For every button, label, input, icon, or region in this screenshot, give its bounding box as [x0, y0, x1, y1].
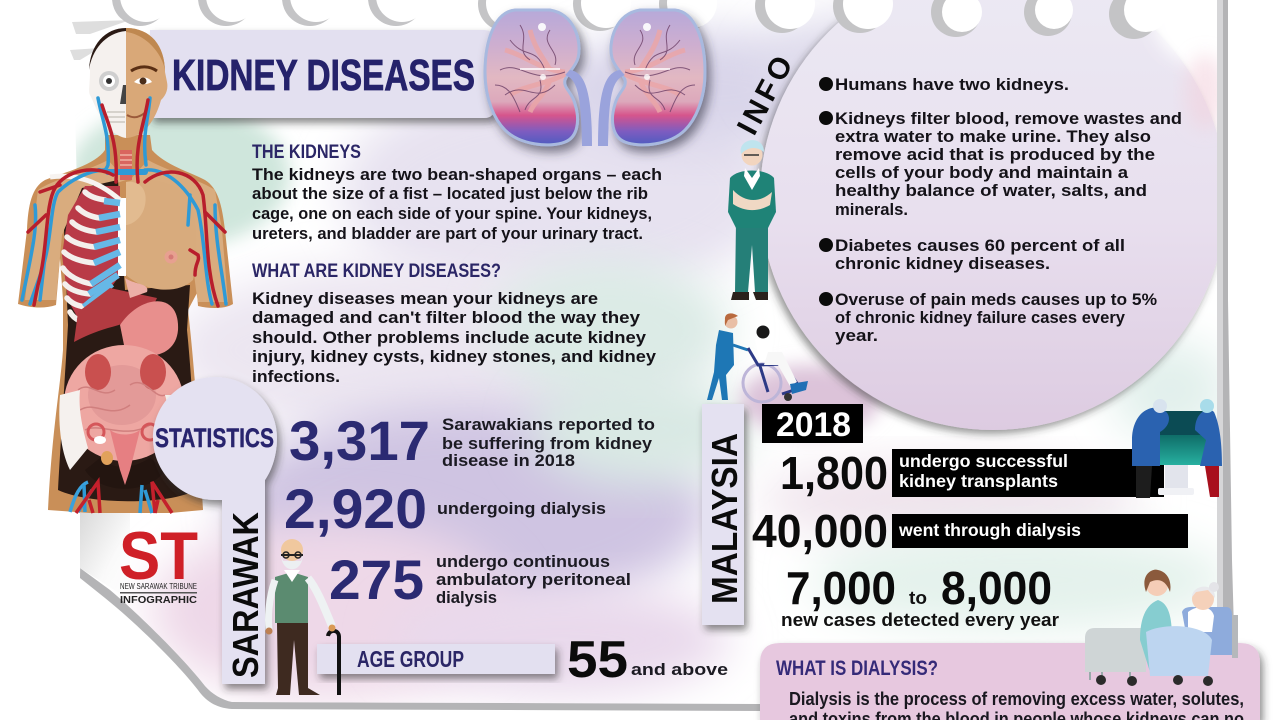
- text block: info bullets: Overuse of pain meds causes up to 5%: [835, 290, 1157, 309]
- stat: 55 and above: and above: [631, 660, 728, 679]
- stat: new cases: new cases detected every year: [781, 610, 1059, 630]
- stat: 3,317: [289, 409, 655, 472]
- heading: statistics: STATISTICS: [155, 423, 274, 453]
- age group bar: [317, 644, 555, 674]
- age group label: AGE GROUP: [357, 646, 464, 672]
- text block: what are kidney diseases: Kidney diseases mean your kidneys are: [252, 289, 598, 308]
- stat: 275: ambulatory peritoneal: [436, 570, 631, 589]
- statistics stem and circle: [153, 377, 277, 684]
- text block: the kidneys: cage, one on each side of your spine. Your kidneys,: [252, 204, 652, 223]
- title: KIDNEY DISEASES: [172, 51, 475, 100]
- stat: 2,920: 2,920: [284, 477, 427, 540]
- chest: [126, 180, 196, 290]
- panel: Malaysia label: [702, 404, 745, 625]
- stat: 40,000 dialysis: went through dialysis: [898, 520, 1081, 540]
- text block: info bullets: extra water to make urine. They also: [835, 127, 1151, 146]
- text block: info bullets: healthy balance of water, salts, and: [835, 181, 1147, 200]
- heading: what is dialysis: WHAT IS DIALYSIS?: [776, 657, 938, 680]
- stat: 275: [329, 548, 631, 611]
- illustration: nurse with wheelchair: [707, 313, 808, 402]
- stat: 2,920: [284, 477, 606, 540]
- label: Sarawak: SARAWAK: [225, 512, 266, 678]
- heading: info label: INFO: [731, 51, 800, 140]
- text block: what are kidney diseases: damaged and can't filter blood the way they: [252, 308, 641, 327]
- text block: the kidneys: THE KIDNEYS: [252, 142, 361, 163]
- stat: 2,920: undergoing dialysis: [437, 499, 606, 518]
- stat: new cases: 7,000: [786, 562, 896, 614]
- stat: new cases: 8,000: [941, 562, 1052, 614]
- stat: 55 and above: 55: [567, 631, 628, 689]
- text block: info bullets: remove acid that is produced by the: [835, 145, 1155, 164]
- pelvis and reproductive organs: [59, 390, 88, 470]
- panel: info circle: [760, 0, 1255, 430]
- liver and stomach: [74, 288, 157, 342]
- stat: new cases: [781, 562, 1059, 630]
- logo: New Sarawak Tribune: NEW SARAWAK TRIBUNE: [120, 582, 197, 591]
- skin body: [18, 135, 233, 513]
- text block: info bullets: minerals.: [835, 200, 908, 219]
- text block: info bullets: Humans have two kidneys.: [835, 75, 1069, 94]
- stat: 1,800 transplants: kidney transplants: [899, 471, 1058, 491]
- stat: 1,800 transplants: [780, 447, 1164, 499]
- year badge: 2018: [776, 406, 851, 444]
- text block: what are kidney diseases: WHAT ARE KIDNEY DISEASES?: [252, 261, 501, 282]
- illustration: elderly man: [266, 539, 332, 695]
- illustration: kidneys: [485, 10, 705, 146]
- logo: New Sarawak Tribune: INFOGRAPHIC: [120, 594, 197, 606]
- text block: info bullets: Kidneys filter blood, remove wastes and: [835, 109, 1182, 128]
- text block: info bullets: cells of your body and maintain a: [835, 163, 1129, 182]
- illustration: surgeons at operating table: [1132, 399, 1222, 498]
- text block: what are kidney diseases: should. Other problems include acute kidney: [252, 328, 647, 347]
- text block: what are kidney diseases: [252, 261, 657, 386]
- logo: New Sarawak Tribune: ST: [119, 518, 198, 594]
- text block: dialysis definition: [789, 689, 1244, 720]
- illustration: human anatomy figure: [18, 28, 233, 513]
- illustration: nurse and patient in bed: [1085, 570, 1235, 686]
- interior cavity: [58, 180, 196, 501]
- head skull half: [89, 28, 126, 138]
- stat: 3,317: be suffering from kidney: [442, 434, 653, 453]
- text block: what are kidney diseases: injury, kidney cysts, kidney stones, and kidney: [252, 347, 657, 366]
- text block: info bullets: [819, 75, 1182, 345]
- stat: 275: undergo continuous: [436, 552, 610, 571]
- stat: 40,000 dialysis: 40,000: [752, 505, 888, 557]
- text block: dialysis definition: Dialysis is the process of removing excess water, solutes,: [789, 689, 1244, 709]
- stat: 3,317: Sarawakians reported to: [442, 415, 655, 434]
- illustration: doctor: [728, 140, 776, 300]
- label: Malaysia: MALAYSIA: [704, 433, 745, 604]
- text block: the kidneys: [252, 142, 662, 243]
- panel: what is dialysis: [760, 643, 1260, 720]
- rib cage: [50, 176, 126, 322]
- stat: new cases: to: [909, 588, 927, 608]
- text block: info bullets: of chronic kidney failure cases every: [835, 308, 1126, 327]
- head skin half: [126, 28, 167, 138]
- stat: 1,800 transplants: 1,800: [780, 447, 888, 499]
- text block: info bullets: Diabetes causes 60 percent of all: [835, 236, 1125, 255]
- intestines: [64, 345, 184, 461]
- stat: 275: dialysis: [436, 588, 497, 607]
- neck and trachea: [120, 150, 132, 180]
- panel: title banner: [150, 30, 495, 118]
- walking cane: [328, 624, 339, 695]
- text block: info bullets: chronic kidney diseases.: [835, 254, 1050, 273]
- text block: info bullets: year.: [835, 326, 878, 345]
- stat: 3,317: disease in 2018: [442, 451, 575, 470]
- blood vessels: [22, 98, 226, 306]
- stat: 55 and above: [567, 631, 728, 689]
- punched holes along top edge: [112, 0, 1168, 39]
- face details: [99, 67, 157, 122]
- stat: 40,000 dialysis: [752, 505, 1188, 557]
- text block: the kidneys: about the size of a fist – located just below the rib: [252, 184, 648, 203]
- stat: 3,317: 3,317: [289, 409, 430, 472]
- stat: 275: 275: [329, 548, 424, 611]
- stat: 1,800 transplants: undergo successful: [899, 451, 1068, 471]
- text block: what are kidney diseases: infections.: [252, 367, 340, 386]
- text block: the kidneys: The kidneys are two bean-shaped organs – each: [252, 165, 662, 184]
- thigh vessels: [70, 482, 172, 513]
- text block: the kidneys: ureters, and bladder are part of your urinary tract.: [252, 224, 643, 243]
